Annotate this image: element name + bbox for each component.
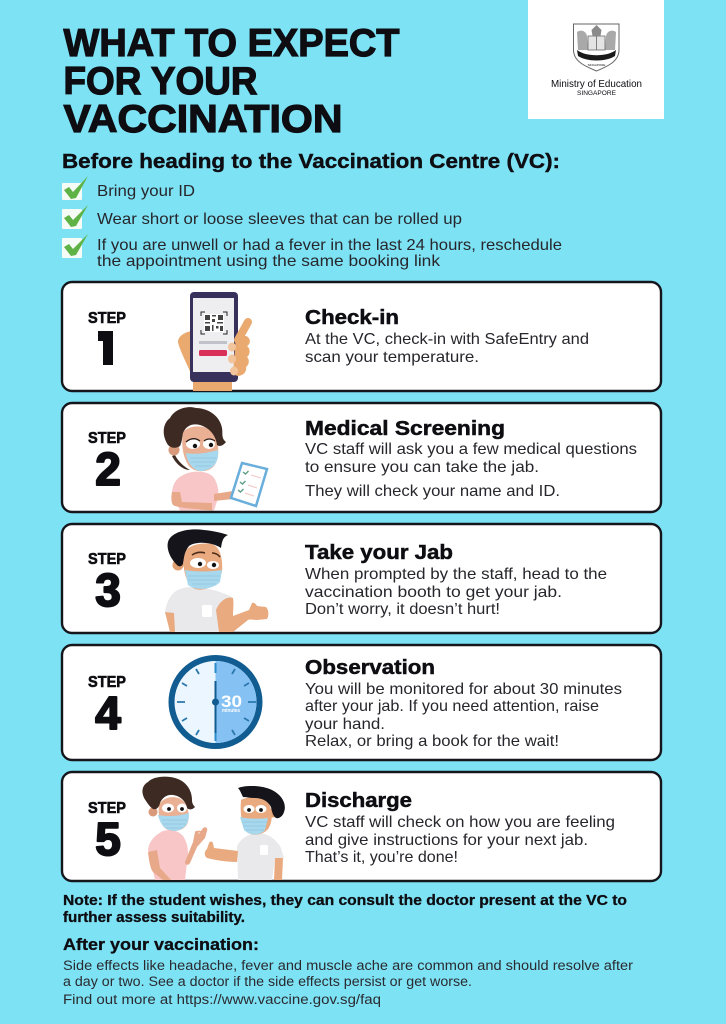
icon: 30 minute clock xyxy=(172,658,260,746)
icon: check 2 xyxy=(62,205,88,229)
panel: step 2 xyxy=(62,403,661,512)
text: discharge: VC staff will check on how you are feeling xyxy=(305,814,615,831)
note xyxy=(63,893,627,926)
text: observation xyxy=(305,656,622,750)
item: reschedule if unwell xyxy=(97,237,562,270)
text: side effects: a day or two. See a doctor if the side effects persist or get worse. xyxy=(63,974,472,989)
text: take your jab: vaccination booth to get your jab. xyxy=(305,584,562,601)
logo: Ministry of Education xyxy=(528,0,664,119)
checklist xyxy=(62,176,562,270)
item: reschedule if unwell: the appointment using the same booking link xyxy=(97,253,441,270)
icon: clipboard xyxy=(231,463,267,506)
illustration: nurse with OK sign xyxy=(142,777,207,880)
step number 2 xyxy=(88,430,126,495)
step number 2: 2 xyxy=(95,443,121,495)
step number 2: STEP xyxy=(88,430,126,447)
panel: step 1 xyxy=(62,282,661,391)
step number 3: 3 xyxy=(95,564,121,616)
panel: step 3 xyxy=(62,524,661,633)
text: side effects: Side effects like headache, fever and muscle ache are common and should resolve after xyxy=(63,958,634,973)
text: discharge: and give instructions for your next jab. xyxy=(305,832,588,849)
illustration: patient with thumbs up xyxy=(205,786,285,880)
text: check-in: Check-in xyxy=(305,306,399,329)
text: take your jab: When prompted by the staff, head to the xyxy=(305,566,607,583)
text: medical screening: VC staff will ask you a few medical questions xyxy=(305,441,637,458)
step number 1 xyxy=(88,312,126,365)
text: check-in: At the VC, check-in with SafeEntry and xyxy=(305,331,589,348)
illustration: patient showing arm xyxy=(165,529,268,632)
icon: check 1 xyxy=(62,176,88,200)
text: side effects: Find out more at https://www.vaccine.gov.sg/faq xyxy=(63,992,381,1007)
step number 1: 1 xyxy=(94,323,120,375)
text: take your jab: Don’t worry, it doesn’t hurt! xyxy=(305,601,500,618)
title: VACCINATION xyxy=(64,98,342,141)
item: reschedule if unwell: If you are unwell or had a fever in the last 24 hours, reschedule xyxy=(97,237,562,254)
panel: step 5 xyxy=(62,772,661,881)
step number 4: STEP xyxy=(88,674,126,691)
text: observation: You will be monitored for about 30 minutes xyxy=(305,681,622,698)
icon: phone with QR code xyxy=(178,292,250,391)
text: side effects xyxy=(63,958,634,1007)
note: further assess suitability. xyxy=(63,910,245,926)
text: observation: your hand. xyxy=(305,716,385,733)
step number 3 xyxy=(88,551,126,616)
heading: before heading to the vaccination centre: Before heading to the Vaccination Centre (VC): xyxy=(62,150,560,173)
step number 4: 4 xyxy=(95,687,121,739)
item: bring ID: Bring your ID xyxy=(97,183,195,200)
logo: Ministry of Education: Ministry of Education xyxy=(551,78,642,90)
title: WHAT TO EXPECT xyxy=(64,22,400,65)
item: sleeves: Wear short or loose sleeves that can be rolled up xyxy=(97,211,462,228)
text: medical screening: They will check your name and ID. xyxy=(305,483,560,500)
title: FOR YOUR xyxy=(64,60,258,103)
icon: crest: SINGAPORE xyxy=(588,63,605,67)
text: observation: Relax, or bring a book for the wait! xyxy=(305,733,559,750)
text: medical screening xyxy=(305,417,637,500)
text: medical screening: Medical Screening xyxy=(305,417,505,440)
step number 5: STEP xyxy=(88,800,126,817)
text: take your jab: Take your Jab xyxy=(305,541,453,564)
icon: check 3 xyxy=(62,234,88,258)
step number 1: STEP xyxy=(88,310,126,327)
illustration: nurse with clipboard xyxy=(164,407,267,510)
panel: step 4 xyxy=(62,645,661,760)
icon: 30 minute clock: 30 xyxy=(221,692,242,711)
text: observation: Observation xyxy=(305,656,435,679)
text: discharge: Discharge xyxy=(305,789,412,812)
text: discharge: That’s it, you’re done! xyxy=(305,849,458,866)
text: medical screening: to ensure you can take the jab. xyxy=(305,459,539,476)
logo: Ministry of Education: SINGAPORE xyxy=(577,91,616,97)
step number 5: 5 xyxy=(95,813,121,865)
text: check-in: scan your temperature. xyxy=(305,349,479,366)
title xyxy=(64,22,400,141)
icon: 30 minute clock: minutes xyxy=(222,708,240,714)
text: check-in xyxy=(305,306,589,366)
step number 3: STEP xyxy=(88,551,126,568)
text: observation: after your jab. If you need attention, raise xyxy=(305,698,599,715)
note: Note: If the student wishes, they can consult the doctor present at the VC to xyxy=(63,893,627,909)
step number 5 xyxy=(88,800,126,865)
text: take your jab xyxy=(305,541,607,618)
heading: after your vaccination: After your vaccination: xyxy=(63,935,259,954)
step number 4 xyxy=(88,674,126,739)
text: discharge xyxy=(305,789,615,866)
